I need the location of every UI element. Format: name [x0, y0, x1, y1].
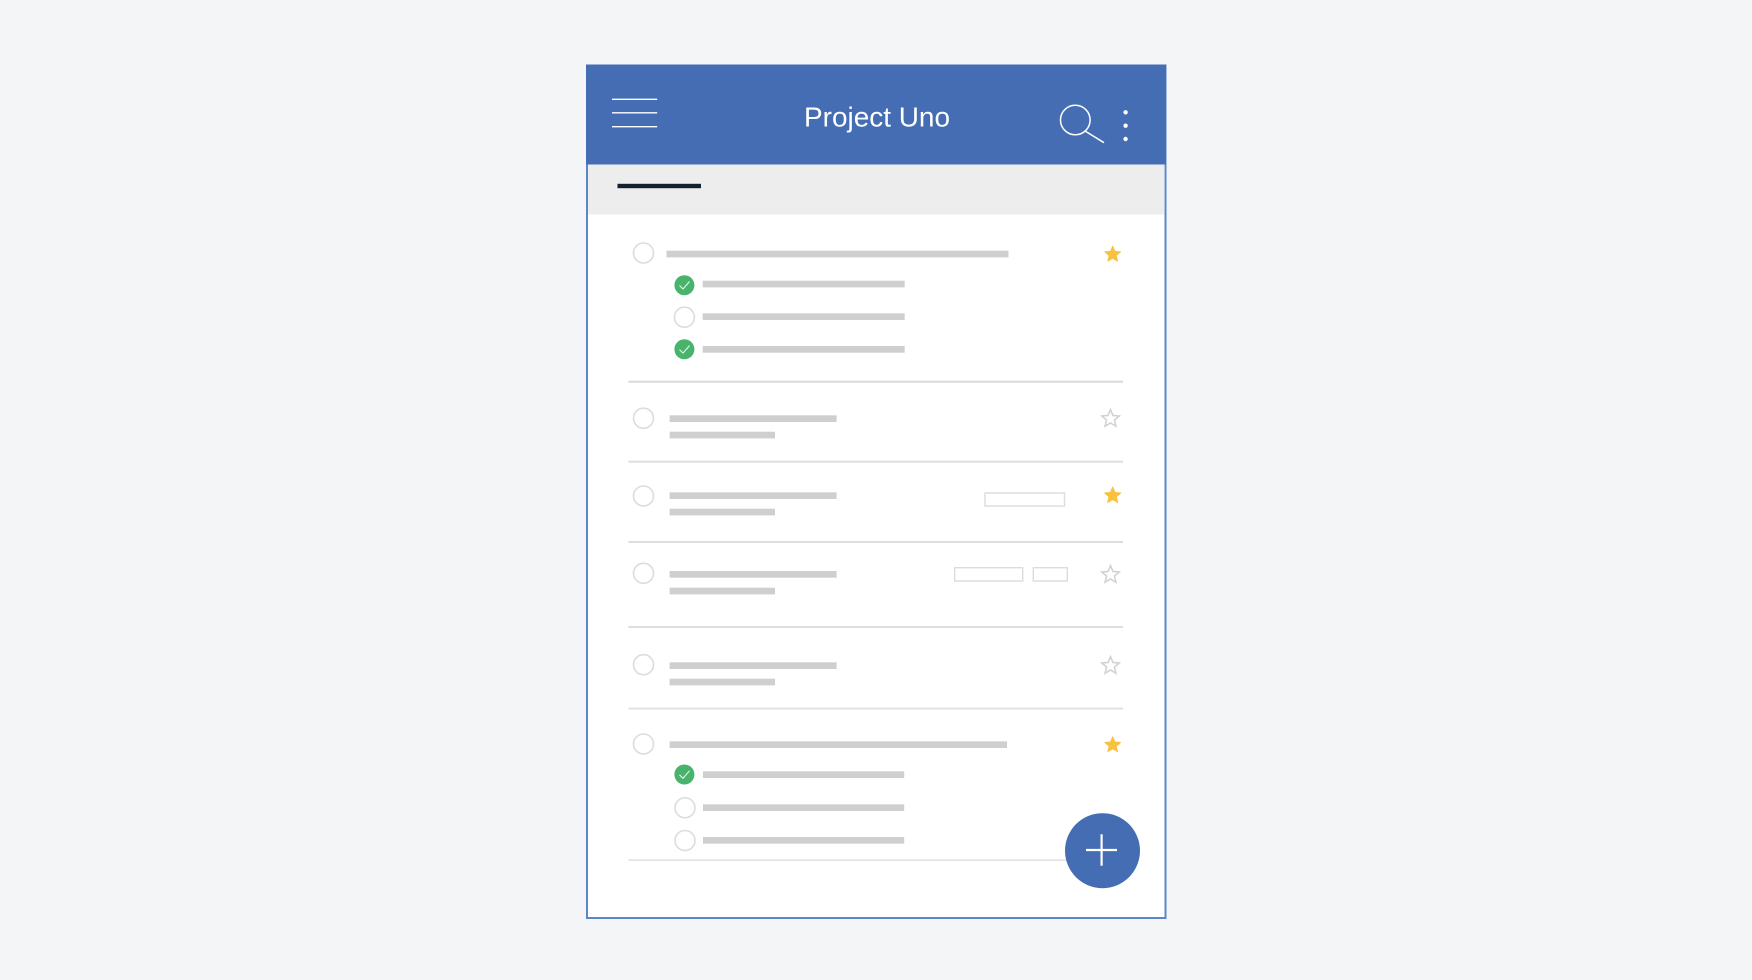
- task group 1: [634, 243, 1120, 359]
- tag: [985, 493, 1064, 506]
- app header bar: [586, 64, 1166, 164]
- task group 6: [634, 734, 1120, 850]
- title: Project Uno: [804, 102, 950, 132]
- subtask checked: [674, 275, 905, 295]
- icon: more menu dots: [1123, 110, 1128, 141]
- icon: search: [1060, 105, 1104, 143]
- radio: [634, 243, 654, 263]
- subtask checked: [674, 764, 904, 784]
- task row 2: [634, 408, 1119, 438]
- icon: outline star: [1102, 410, 1119, 426]
- icon: filled star: [1105, 737, 1120, 752]
- section label placeholder: [618, 184, 701, 188]
- subtask checked: [674, 339, 905, 359]
- subtask open: [675, 798, 904, 818]
- task title: [666, 251, 1008, 257]
- icon: filled star: [1105, 246, 1120, 261]
- tag: [955, 568, 1023, 581]
- panel: phone app screen: [586, 64, 1166, 918]
- task row 4: [634, 563, 1119, 594]
- icon: plus: [1086, 834, 1117, 866]
- add button: [1065, 813, 1140, 888]
- task row 3: [634, 486, 1121, 515]
- icon: filled star: [1105, 487, 1121, 502]
- icon: outline star: [1102, 657, 1119, 673]
- task row 5: [634, 655, 1119, 685]
- tag: [1033, 568, 1067, 581]
- section band: [588, 164, 1164, 214]
- icon: hamburger menu: [612, 99, 657, 127]
- subtask open: [675, 830, 904, 850]
- icon: outline star: [1102, 566, 1119, 582]
- subtask open: [674, 307, 905, 327]
